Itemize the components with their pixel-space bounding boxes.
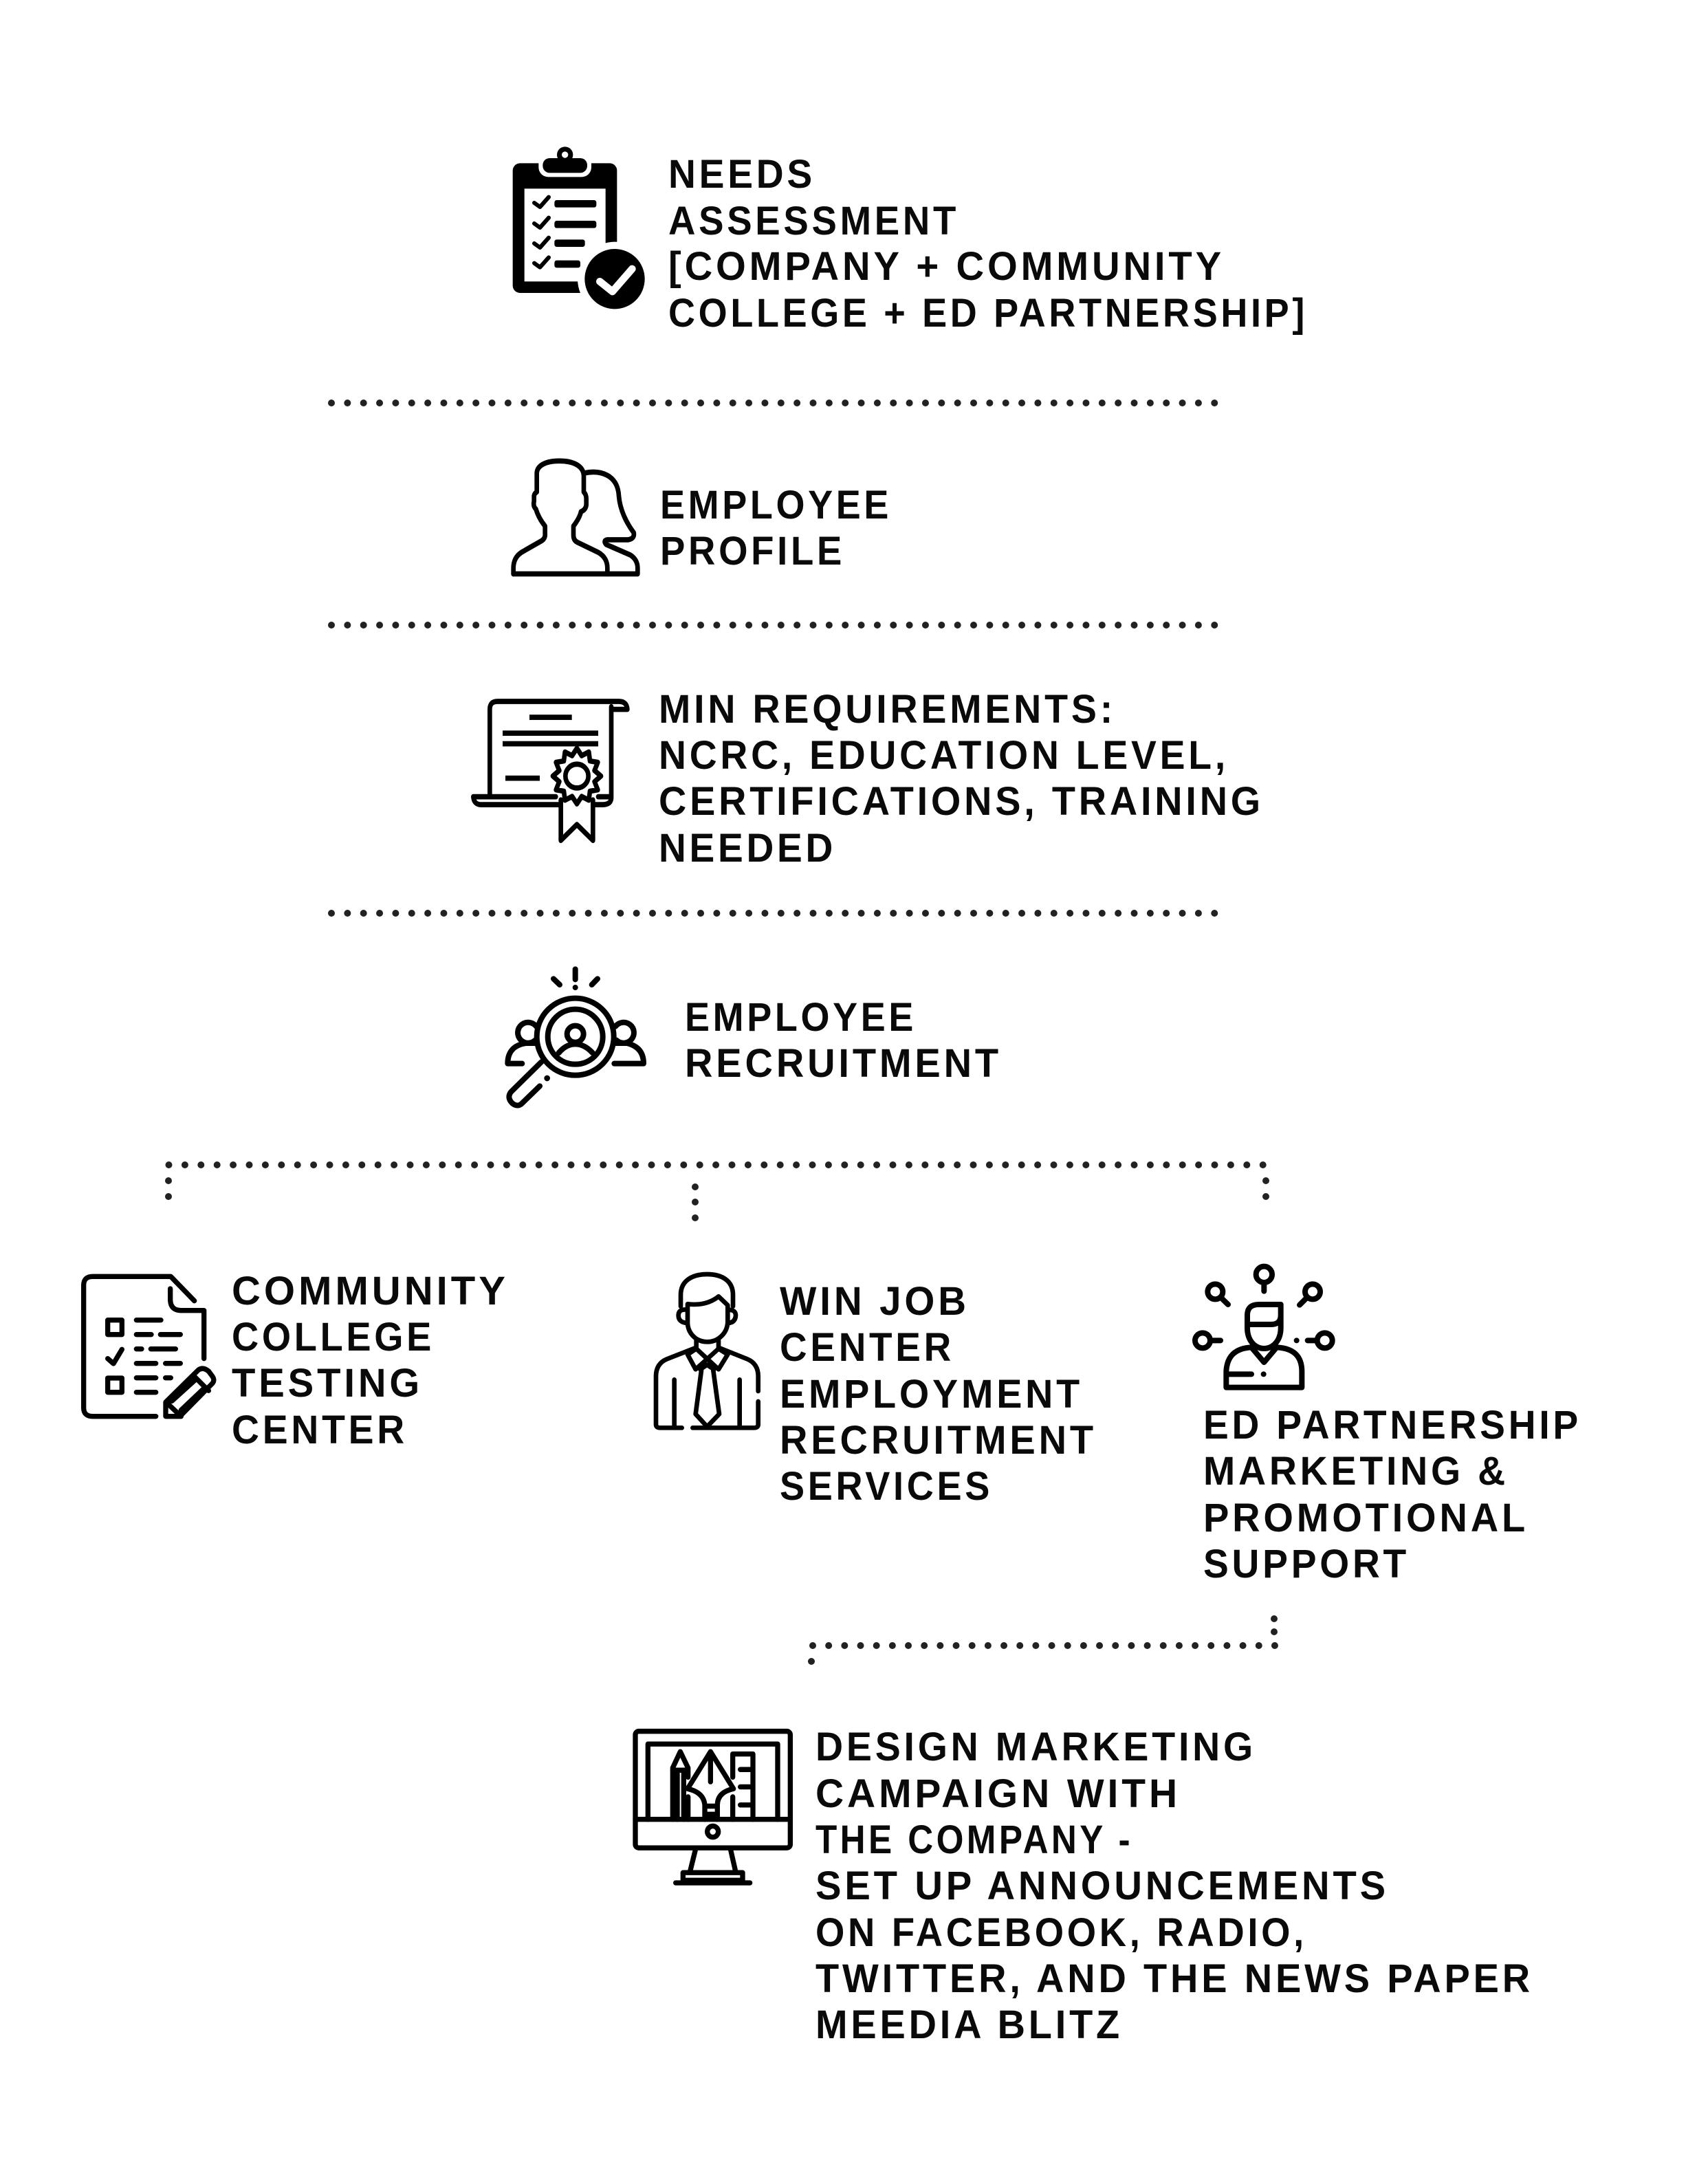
dotted divider 2 (331, 622, 1216, 629)
dotted divider 3 (331, 910, 1216, 917)
text: employee recruitment (685, 995, 1002, 1086)
text: employee profile (660, 483, 892, 574)
text: win job center: WIN JOB (780, 1279, 970, 1324)
text: minimum requirements: MIN REQUIREMENTS: (659, 687, 1116, 732)
text: employee recruitment: EMPLOYEE (685, 995, 917, 1040)
icon: test document with pencil (84, 1276, 214, 1417)
dotted connector: three-way branch (165, 1165, 1269, 1221)
text: minimum requirements (659, 687, 1264, 871)
text: needs assessment: NEEDS (668, 152, 815, 197)
text: ed partnership marketing: MARKETING & (1203, 1449, 1509, 1494)
icon: clipboard with check badge (513, 146, 652, 316)
text: employee recruitment: RECRUITMENT (685, 1041, 1002, 1086)
icon: monitor with design tools (635, 1732, 790, 1883)
text: community college testing center: COLLEGE (232, 1315, 435, 1360)
icon: two person profile (514, 461, 637, 574)
text: needs assessment: COLLEGE + ED PARTNERSHIP] (668, 291, 1308, 336)
icon: certificate with rosette (473, 701, 627, 840)
dotted divider 1 (331, 400, 1216, 406)
dotted connector: lower branch (808, 1615, 1278, 1665)
text: design marketing campaign: TWITTER, AND THE NEWS PAPER (815, 1956, 1533, 2001)
text: win job center: CENTER (780, 1325, 954, 1370)
text: design marketing campaign: DESIGN MARKETING (815, 1725, 1256, 1769)
text: employee profile: EMPLOYEE (660, 483, 892, 527)
text: minimum requirements: NCRC, EDUCATION LEVEL, (659, 733, 1229, 778)
text: win job center: RECRUITMENT (780, 1418, 1097, 1463)
text: needs assessment (668, 152, 1308, 336)
text: minimum requirements: CERTIFICATIONS, TRAINING (659, 779, 1264, 824)
text: ed partnership marketing: ED PARTNERSHIP (1203, 1403, 1581, 1448)
text: design marketing campaign: SET UP ANNOUNCEMENTS (815, 1864, 1389, 1908)
text: needs assessment: ASSESSMENT (668, 199, 959, 243)
text: ed partnership marketing: SUPPORT (1203, 1542, 1410, 1586)
icon: businessman with tie (656, 1274, 758, 1428)
text: needs assessment: [COMPANY + COMMUNITY (668, 244, 1225, 289)
text: design marketing campaign: ON FACEBOOK, RADIO, (815, 1910, 1307, 1955)
text: community college testing center: TESTING (232, 1361, 423, 1406)
text: design marketing campaign (815, 1725, 1533, 2047)
text: employee profile: PROFILE (660, 529, 845, 574)
text: ed partnership marketing: PROMOTIONAL (1203, 1496, 1529, 1540)
text: community college testing center: CENTER (232, 1408, 408, 1452)
text: win job center: SERVICES (780, 1464, 993, 1509)
text: design marketing campaign: MEEDIA BLITZ (815, 2002, 1123, 2047)
text: ed partnership marketing (1203, 1403, 1581, 1586)
text: community college testing center (232, 1269, 509, 1452)
text: win job center (780, 1279, 1097, 1509)
text: win job center: EMPLOYMENT (780, 1372, 1083, 1417)
text: design marketing campaign: THE COMPANY - (815, 1817, 1133, 1862)
icon: person with magnifiers (1195, 1267, 1333, 1388)
icon: recruitment magnifier (507, 969, 644, 1106)
text: design marketing campaign: CAMPAIGN WITH (815, 1771, 1181, 1816)
text: minimum requirements: NEEDED (659, 826, 836, 871)
text: community college testing center: COMMUNITY (232, 1269, 509, 1313)
